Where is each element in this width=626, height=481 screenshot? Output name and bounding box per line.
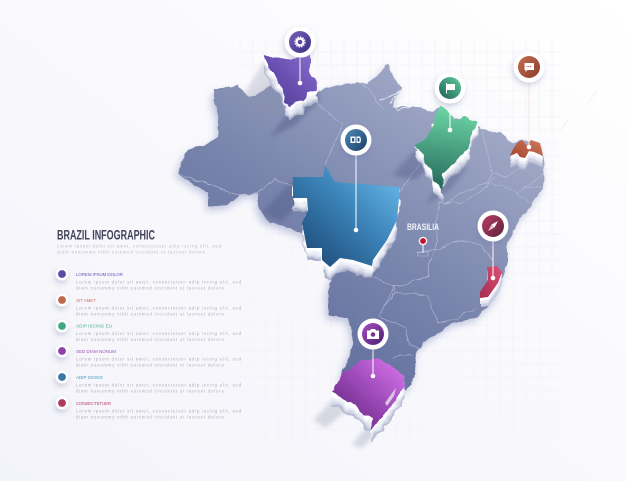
- pin: speech bubble: [514, 52, 544, 82]
- pin line: Ceara: [527, 78, 531, 149]
- region: Roraima: [263, 55, 318, 120]
- coastal estuary detail: [380, 88, 410, 110]
- legend item 4: Lorem ipsum dolor sit amet, consectetuer adip iscing elit, sed: [76, 356, 242, 362]
- map shadow: [175, 67, 543, 399]
- legend item 3: Lorem ipsum dolor sit amet, consectetuer adip iscing elit, sed: [76, 331, 242, 336]
- intro text: Lorem ipsum dolor sit amet, consectetuer adip iscing elit, sed: [57, 244, 222, 248]
- legend item 4: [56, 344, 242, 368]
- capital pin: [418, 237, 428, 256]
- legend item 6: CONSECTETUER: [76, 401, 112, 406]
- state borders: [177, 82, 545, 358]
- pin: compass: [478, 210, 508, 242]
- legend item 4: SED DIAM NONUM: [76, 349, 116, 354]
- region: Maranhao: [415, 106, 478, 203]
- map of Brazil: [177, 63, 545, 395]
- region: Rio Grande do Sul: [332, 359, 405, 443]
- legend item 6: [56, 396, 242, 420]
- pin: gear: [284, 26, 316, 58]
- intro text: [57, 244, 222, 254]
- decorative faint diagonal: [525, 90, 597, 165]
- legend item 3: ADIP ISCING EU: [76, 324, 112, 328]
- legend item 2: SIT AMET: [76, 298, 96, 303]
- pin line: Mato Grosso: [354, 150, 358, 232]
- legend item 2: diam nonummy nibh euismod tincidunt ut laoreet dolore: [76, 312, 225, 316]
- pin: book: [340, 124, 372, 156]
- region: Espirito Santo: [480, 266, 503, 307]
- legend item 4: diam nonummy nibh euismod tincidunt ut laoreet dolore: [76, 362, 225, 368]
- legend item 1: LOREM IPSUM DOLOR: [76, 272, 124, 277]
- legend item 5: [56, 370, 242, 394]
- legend item 5: Lorem ipsum dolor sit amet, consectetuer adip iscing elit, sed: [76, 382, 242, 388]
- intro text: diam nonummy nibh euismod tincidunt ut laoreet dolore: [57, 250, 206, 254]
- title: BRAZIL INFOGRAPHIC: [57, 228, 155, 242]
- legend item 6: diam nonummy nibh euismod tincidunt ut laoreet dolore: [76, 414, 225, 420]
- region: Mato Grosso: [293, 165, 400, 280]
- long shadows: [240, 60, 470, 448]
- legend item 3: [56, 320, 242, 342]
- pin line: Maranhao: [448, 100, 452, 132]
- legend item 3: diam nonummy nibh euismod tincidunt ut laoreet dolore: [76, 337, 225, 342]
- legend item 1: Lorem ipsum dolor sit amet, consectetuer adip iscing elit, sed: [76, 280, 242, 284]
- pin: camera: [358, 318, 388, 350]
- capital label: Brasilia: BRASILIA: [407, 222, 439, 232]
- pin line: Rio Grande do Sul: [371, 345, 375, 378]
- background grid: [240, 40, 560, 440]
- legend item 5: ADIP ISCING: [76, 375, 103, 380]
- region: Ceara: [510, 140, 543, 170]
- legend item 6: Lorem ipsum dolor sit amet, consectetuer adip iscing elit, sed: [76, 408, 242, 414]
- legend item 1: diam nonummy nibh euismod tincidunt ut laoreet dolore: [76, 286, 225, 290]
- legend item 1: [56, 268, 242, 290]
- legend item 2: Lorem ipsum dolor sit amet, consectetuer adip iscing elit, sed: [76, 306, 242, 310]
- pin: flag: [434, 72, 466, 104]
- pin line: Espirito Santo: [491, 236, 495, 280]
- legend item 5: diam nonummy nibh euismod tincidunt ut laoreet dolore: [76, 388, 225, 394]
- legend item 2: [56, 294, 242, 316]
- pin line: Roraima: [298, 50, 302, 85]
